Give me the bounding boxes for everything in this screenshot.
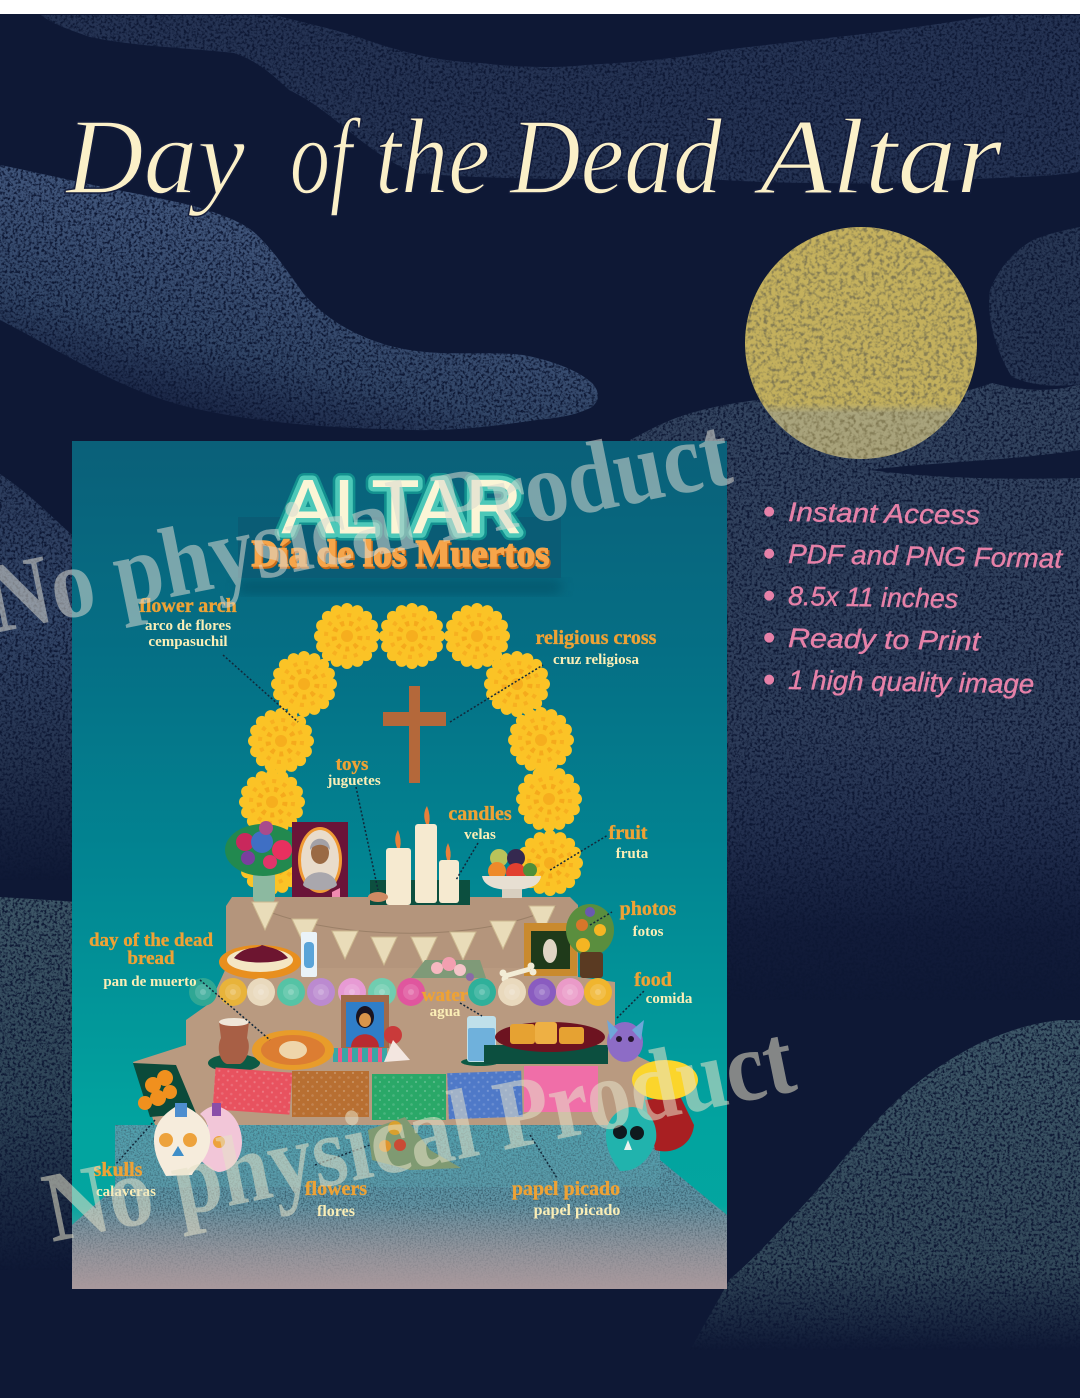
list item: print: Ready to Print (788, 623, 982, 656)
candles (370, 806, 470, 905)
teal skull (606, 1107, 656, 1171)
label: flower arch (139, 595, 237, 650)
label: photos: photos (620, 898, 677, 920)
label: fruit: fruit (609, 822, 648, 844)
sunflower bouquet and pot (566, 904, 614, 978)
subheading: Dia de los Muertos: Día de los Muertos (252, 533, 550, 575)
sugar skull: white (154, 1103, 210, 1176)
poster floor (72, 1125, 727, 1289)
subheading: Dia de los Muertos: Día de los Muertos (253, 535, 551, 577)
label: skulls: calaveras (96, 1184, 156, 1200)
label: religious cross (536, 627, 657, 668)
label: skulls (94, 1159, 156, 1200)
water glass (461, 1016, 499, 1066)
title: the (375, 98, 490, 217)
heading: ALTAR neon: ALTAR (282, 465, 522, 550)
watermark: bottom: No physical Product (34, 1003, 803, 1264)
label: flower arch: arco de flores (145, 618, 231, 634)
label: flowers: flores (317, 1203, 355, 1220)
label: flowers (305, 1178, 367, 1220)
label: candles (448, 803, 512, 843)
label: day of the dead bread: day of the dead (89, 930, 213, 951)
label: day of the dead bread: pan de muerto (103, 974, 197, 990)
label: photos (620, 898, 677, 940)
flower tray (411, 957, 486, 981)
bunting (252, 902, 556, 965)
clay jug (208, 1018, 260, 1072)
label: toys (326, 754, 381, 789)
bone (500, 962, 536, 982)
label: food: food (634, 969, 672, 991)
sugar bread plate (219, 945, 301, 979)
girl photo with rug (333, 995, 389, 1062)
framed dog photo (524, 923, 577, 976)
moon (745, 227, 977, 459)
food plate (484, 1022, 608, 1064)
list item: formats: PDF and PNG Format (788, 539, 1064, 574)
pan de muerto plate (252, 1030, 334, 1070)
prayer candle (301, 932, 317, 977)
title: Dead (508, 98, 723, 217)
flower arch (239, 603, 583, 896)
heading: ALTAR neon: ALTAR (282, 465, 522, 550)
red pot with yellow flower (632, 1060, 698, 1151)
label: religious cross: religious cross (536, 627, 657, 649)
list item: size: 8.5x 11 inches (788, 581, 958, 614)
label: toys: juguetes (326, 773, 381, 789)
label: flower arch: flower arch (139, 595, 237, 617)
bouquet in vase (225, 821, 301, 903)
label: food: comida (646, 991, 693, 1007)
toy (368, 892, 388, 902)
label: religious cross: cruz religiosa (553, 652, 639, 668)
altar tiers (133, 897, 650, 1125)
poster title band (238, 465, 561, 592)
callout lines (115, 655, 645, 1178)
title: Altar (753, 98, 1003, 217)
furby toy (607, 1020, 644, 1062)
label: day of the dead bread (89, 930, 213, 990)
dark wedge in right cloud (870, 450, 1080, 479)
label: skulls: skulls (94, 1159, 143, 1181)
panel: altar poster (72, 441, 727, 1289)
sugar skull: pink (200, 1103, 242, 1172)
floor flowers (368, 1117, 461, 1170)
watermark: top: No physical Product (0, 395, 739, 655)
title (64, 98, 1003, 217)
religious cross (383, 686, 446, 783)
label: papel picado: papel picado (512, 1178, 620, 1200)
label: candles: candles (448, 803, 512, 825)
top white strip (0, 0, 1080, 14)
label: water (422, 985, 469, 1020)
label: food (634, 969, 693, 1007)
fruit bowl (482, 849, 541, 898)
label: papel picado (512, 1178, 620, 1219)
title: of (290, 98, 362, 217)
heading: ALTAR neon: ALTAR (282, 465, 522, 550)
label: fruit (609, 822, 649, 862)
marigold bunch (133, 1063, 196, 1117)
label: toys: toys (336, 754, 368, 775)
label: papel picado: papel picado (534, 1202, 620, 1219)
framed portrait (292, 822, 348, 897)
label: flower arch: cempasuchil (148, 634, 228, 650)
title: Day (64, 98, 245, 217)
papel picado banners (213, 1066, 598, 1120)
label: flowers: flowers (305, 1178, 367, 1200)
paper flower row (189, 978, 612, 1006)
label: day of the dead bread: bread (127, 948, 175, 969)
label: fruit: fruta (616, 846, 649, 862)
label: photos: fotos (633, 924, 664, 940)
feature list (764, 497, 1064, 699)
label: water: agua (430, 1004, 461, 1020)
list item: image: 1 high quality image (788, 665, 1034, 699)
label: candles: velas (464, 827, 496, 843)
doll (384, 1026, 410, 1062)
label: water: water (422, 985, 469, 1006)
list item: instant access: Instant Access (788, 497, 980, 530)
